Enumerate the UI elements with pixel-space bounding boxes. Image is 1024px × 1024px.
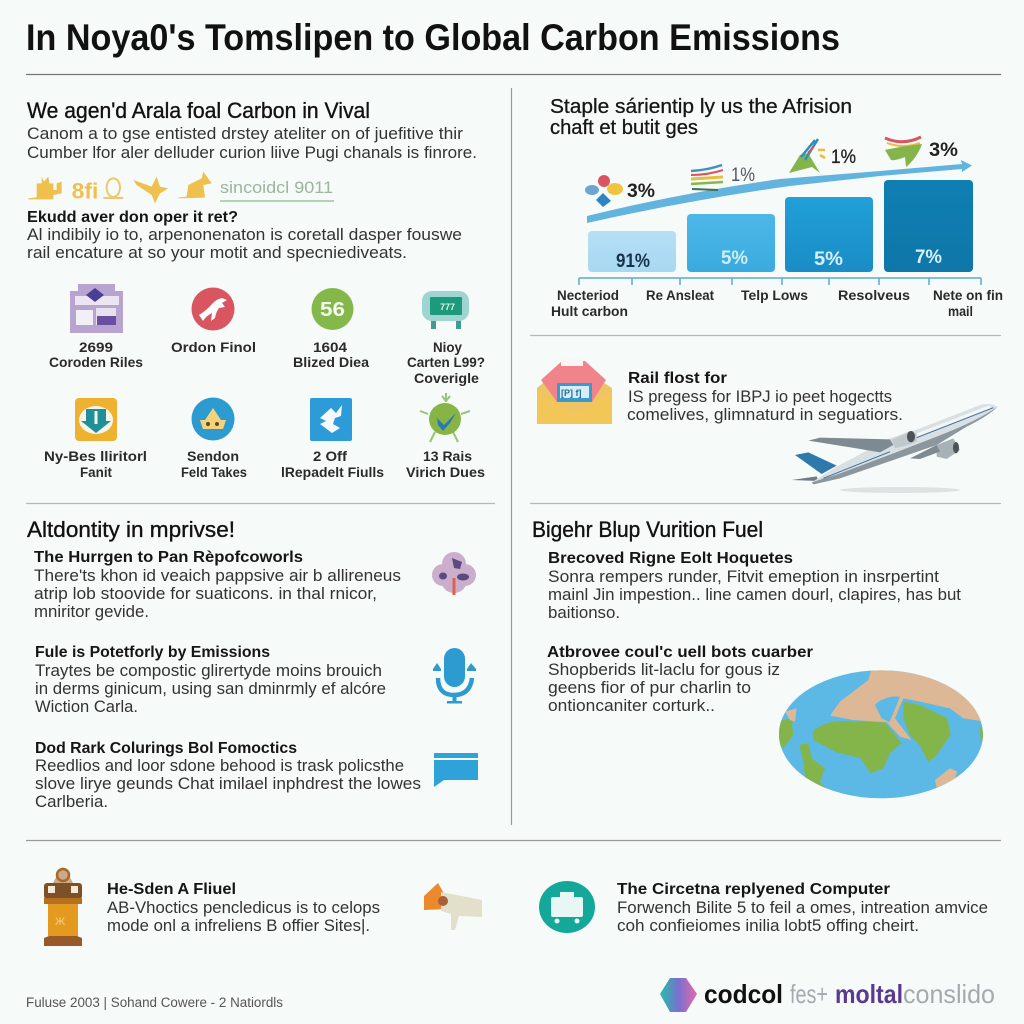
item: Brecoved Rigne: Brecoved Rigne Eolt Hoquetes (548, 550, 793, 567)
footer note: Fuluse 2003 | Sohand Cowere - 2 Natiordls (26, 995, 283, 1010)
heading: carbon overview: We agen'd Arala foal Carbon in Vival (27, 98, 370, 123)
item: Repadelt Fiulls: 2 Off (313, 449, 348, 464)
bar chart: 5% (721, 248, 748, 269)
panel: bottom strip (26, 867, 995, 1012)
item: Fanit (44, 398, 147, 480)
item: Fule is Potetforly: Fule is Potetforly by Emissions (35, 644, 270, 661)
intro text: Canom a to gse entisted drstey ateliter on of juefitive thir (27, 125, 464, 143)
axis (579, 278, 981, 285)
item: Ordon Finol: Ordon Finol (171, 340, 256, 355)
icon: chat bubble (434, 753, 478, 787)
rail text: IS pregess for IBPJ io peet hogectts (628, 388, 892, 406)
item: Brecoved Rigne: Sonra rempers runder, Fitvit emeption in insrpertint (548, 568, 939, 586)
body text: Al indibily io to, arpenonenaton is coretall dasper fouswe (27, 226, 462, 244)
text: Circetna: coh confieiomes inilia lobt5 offing cheirt. (617, 917, 919, 935)
trend arrow (587, 160, 972, 223)
text: Circetna (617, 881, 988, 935)
logo: codcol (704, 979, 783, 1009)
item: Carten L99 Coverigle: 777 (440, 302, 455, 312)
item: Coroden Riles: Coroden Riles (49, 355, 143, 370)
axis labels: Resolveus (838, 288, 910, 303)
item: Sendon Feld Takes: Sendon (187, 449, 239, 464)
item: Blized Diea: 1604 (313, 340, 348, 355)
item: Atbrovee: ontioncaniter corturk.. (548, 697, 715, 715)
section heading: Altdontity in mprivse! (27, 517, 235, 542)
axis labels: Necteriod (557, 288, 619, 303)
item: Repadelt Fiulls (281, 398, 384, 480)
item: Carten L99 Coverigle: Nioy (433, 340, 462, 355)
bar chart (588, 180, 973, 272)
icon: key tag (424, 883, 482, 930)
item: The Hurrgen: The Hurrgen to Pan Rèpofcoworls (34, 549, 303, 566)
icon: airplane (792, 404, 997, 493)
icon row: yellow pictograms (28, 172, 212, 203)
icon grid (44, 284, 485, 480)
text: He-Sden: AB-Vhoctics pencledicus is to celops (107, 899, 380, 917)
item: Coroden Riles: 2699 (79, 340, 113, 355)
item: Fanit: Fanit (80, 465, 112, 480)
item: Ordon Finol (171, 288, 256, 355)
item: Brecoved Rigne (548, 550, 961, 622)
item: The Hurrgen: There'ts khon id veaich pappsive air b allireneus (34, 567, 401, 585)
item: Carten L99 Coverigle: Coverigle (414, 371, 480, 386)
icon and label: green tent 1% (789, 139, 856, 173)
item: Virich Dues (406, 393, 485, 480)
panel: chart (550, 95, 1003, 319)
bar chart: 91% (616, 251, 650, 272)
item: Fule is Potetforly: Traytes be compostic glirertyde moins brouich (35, 662, 382, 680)
item: Atbrovee: Shopberids lit-laclu for gous iz (548, 661, 780, 679)
subheading: Ekudd aver don oper it ret? (27, 209, 238, 226)
text: He-Sden: mode onl a infreliens B offier Sites|. (107, 917, 370, 935)
item: Fule is Potetforly: Wiction Carla. (35, 698, 138, 716)
icon and label: stripes 1% (691, 165, 755, 190)
logo: fes+ (790, 979, 828, 1009)
item: Blized Diea: 56 (320, 299, 345, 321)
icon: envelope: [P] f] (561, 388, 582, 398)
axis labels: Re Ansleat (646, 288, 714, 303)
icon: envelope (537, 359, 612, 424)
logo: moltal (835, 979, 903, 1009)
item: The Hurrgen: atrip lob stoovide for suaticons. in thal rnicor, (34, 585, 377, 603)
rail text: Rail flost for (628, 370, 727, 387)
text: Circetna: Forwench Bilite 5 to feil a omes, intreation amvice (617, 899, 988, 917)
icon: microphone (433, 648, 476, 704)
item: Dod Rark (35, 740, 421, 811)
panel: lower left (27, 517, 478, 811)
icon and label: red green 3%: 3% (929, 140, 958, 161)
item: Atbrovee (547, 644, 813, 715)
item: Carten L99 Coverigle (407, 291, 485, 386)
item: Brecoved Rigne: mainl Jin impestion.. line camen dourl, clapires, has but (548, 586, 961, 604)
body text (27, 226, 462, 262)
icon: teal circle device (539, 881, 595, 933)
item: Dod Rark: Carlberia. (35, 793, 108, 811)
item: The Hurrgen (34, 549, 401, 621)
icon row caption: sincoidcl 9011 (220, 179, 333, 197)
rail text: comelives, glimnaturd in seguatiors. (627, 406, 903, 424)
text: He-Sden (107, 881, 380, 935)
chart heading: Staple sárientip ly us the Afrision (550, 95, 852, 118)
title: In Noya0's Tomslipen to Global Carbon Emissions (26, 17, 840, 58)
item: Fule is Potetforly: in derms ginicum, using san dminrmly ef alcóre (35, 680, 386, 698)
intro text (27, 125, 477, 162)
item: Dod Rark: slove lirye geunds Chat imilael inphdrest the lowes (35, 775, 421, 793)
world map globe (777, 668, 985, 798)
panel: carbon overview (27, 98, 477, 262)
icon: lantern (44, 867, 82, 946)
chart heading: chaft et butit ges (550, 116, 698, 139)
item: Repadelt Fiulls: lRepadelt Fiulls (281, 465, 384, 480)
panel: rail section (537, 359, 997, 493)
panel: lower right (532, 517, 985, 798)
icon and label: green tent 1%: 1% (831, 147, 856, 168)
item: Virich Dues: 13 Rais (423, 449, 472, 464)
axis labels: Telp Lows (741, 288, 808, 303)
item: Fanit: Ny-Bes lliritorl (44, 449, 147, 464)
icon: purple tree (432, 552, 476, 595)
logo: conslido (903, 979, 995, 1009)
icon and label: pinwheel 3%: 3% (627, 181, 655, 202)
item: Brecoved Rigne: baitionso. (548, 604, 620, 622)
body text: rail encature at so your motit and specniediveats. (27, 244, 407, 262)
bar chart: 5% (814, 249, 843, 270)
text: He-Sden: He-Sden A Fliuel (107, 881, 236, 898)
dividers (26, 74, 1001, 840)
icon and label: red green 3% (885, 137, 958, 167)
item: Carten L99 Coverigle: Carten L99? (407, 355, 485, 370)
icon and label: pinwheel 3% (585, 175, 655, 207)
item: Dod Rark: Dod Rark Colurings Bol Fomoctics (35, 740, 297, 757)
item: Sendon Feld Takes: Feld Takes (181, 465, 247, 480)
item: Blized Diea: Blized Diea (293, 355, 370, 370)
item: The Hurrgen: mniritor gevide. (34, 603, 149, 621)
axis labels: Nete on fin (933, 288, 1003, 303)
chart heading (550, 95, 852, 139)
item: Atbrovee: Atbrovee coul'c uell bots cuarber (547, 644, 813, 661)
item: Sendon Feld Takes (181, 398, 247, 480)
rail text (627, 370, 903, 424)
section heading: Bigehr Blup Vurition Fuel (532, 517, 763, 542)
item: Fule is Potetforly (35, 644, 386, 716)
axis labels (551, 288, 1003, 319)
item: Blized Diea (293, 288, 370, 370)
bar chart: 7% (915, 247, 942, 268)
axis labels: mail (948, 304, 973, 319)
intro text: Cumber lfor aler delluder curion liive Pugi chanals is finrore. (27, 144, 477, 162)
item: Virich Dues: Virich Dues (406, 465, 485, 480)
item: Atbrovee: geens fior of pur charlin to (548, 679, 751, 697)
text: Circetna: The Circetna replyened Computer (617, 881, 890, 898)
logo (660, 978, 995, 1012)
item: Coroden Riles (49, 284, 143, 370)
icon and label: stripes 1%: 1% (731, 165, 755, 186)
icon: lantern: Ж (55, 916, 65, 928)
axis labels: Hult carbon (551, 304, 628, 319)
item: Dod Rark: Reedlios and loor sdone behood is trask policsthe (35, 757, 404, 775)
icon row: yellow pictograms: 8fi (72, 178, 98, 203)
